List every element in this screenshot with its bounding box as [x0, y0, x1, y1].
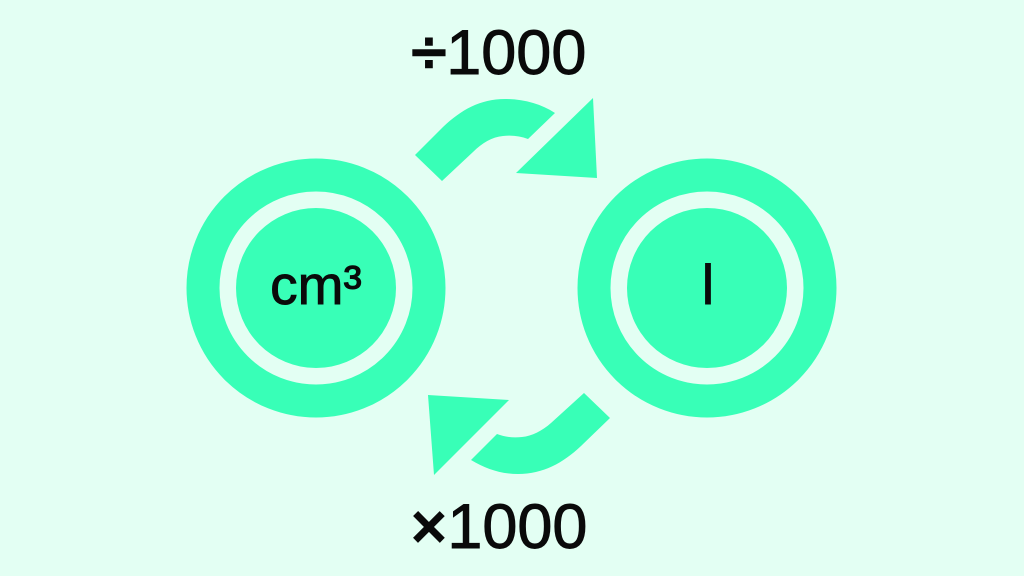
circle: cm³ unit	[203, 175, 429, 401]
circle: cm³ unit: cm³	[270, 254, 362, 316]
label: divide by 1000: ÷1000	[412, 18, 586, 88]
circle: l unit	[594, 175, 820, 401]
circle: l unit: l	[702, 253, 714, 316]
arrow: cm³ to l	[415, 98, 597, 181]
label: multiply by 1000: ×1000	[411, 492, 587, 562]
arrow: l to cm³	[428, 393, 610, 475]
